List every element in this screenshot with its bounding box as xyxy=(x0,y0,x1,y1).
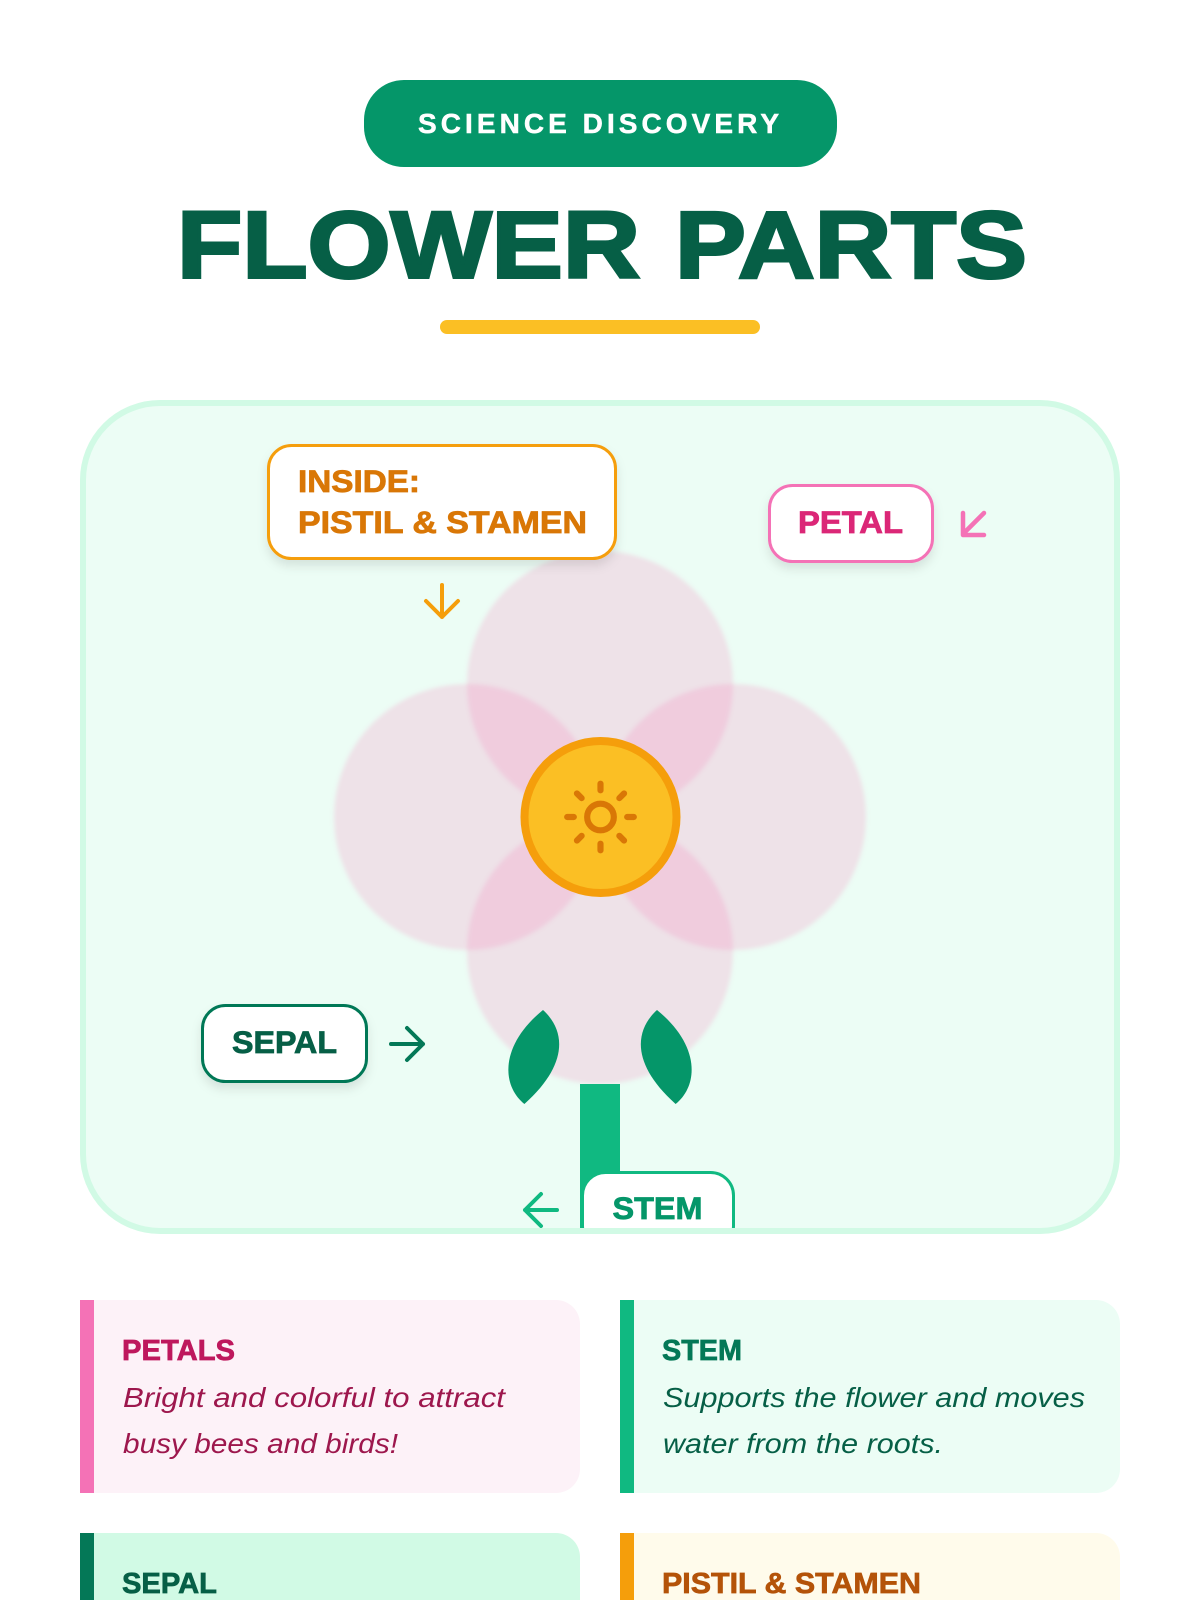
badge: science discovery xyxy=(364,80,837,167)
card: petals xyxy=(80,1300,580,1493)
right sepal xyxy=(641,1010,692,1104)
title xyxy=(177,192,1027,298)
icon: sun xyxy=(567,784,634,850)
card: stem: water from the roots. xyxy=(663,1428,943,1459)
label: stem xyxy=(584,1171,735,1228)
arrow: stem xyxy=(525,1194,557,1226)
flower center xyxy=(524,741,676,893)
card: sepal: SEPAL xyxy=(122,1568,217,1600)
title underline xyxy=(440,320,760,334)
card: pistil and stamen xyxy=(620,1533,1120,1600)
card: stem: STEM xyxy=(662,1335,742,1367)
card: petals: Bright and colorful to attract xyxy=(123,1382,506,1413)
label: sepal: SEPAL xyxy=(232,1024,337,1060)
title: PARTS xyxy=(675,192,1027,298)
card: pistil and stamen: PISTIL & STAMEN xyxy=(662,1568,921,1600)
panel: flower diagram xyxy=(83,403,1117,1248)
card: stem: Supports the flower and moves xyxy=(663,1382,1085,1413)
arrow: petal xyxy=(963,513,984,535)
arrow: sepal xyxy=(391,1028,423,1060)
badge: science discovery: SCIENCE DISCOVERY xyxy=(418,108,779,139)
left sepal xyxy=(508,1010,559,1104)
label: petal: PETAL xyxy=(798,504,903,540)
label: sepal xyxy=(202,1006,366,1082)
card: petals: busy bees and birds! xyxy=(123,1428,398,1459)
label: stem: STEM xyxy=(612,1190,702,1226)
label: inside pistil and stamen: PISTIL & STAMEN xyxy=(298,504,587,540)
card: stem xyxy=(620,1300,1120,1493)
card: petals: PETALS xyxy=(122,1335,235,1367)
arrow: down to center xyxy=(426,585,458,617)
label: inside pistil and stamen: INSIDE: xyxy=(298,463,420,499)
flower petals xyxy=(334,551,866,1084)
card: sepal xyxy=(80,1533,580,1600)
stem xyxy=(580,1084,620,1244)
label: inside pistil and stamen xyxy=(268,446,616,558)
title: FLOWER xyxy=(177,192,640,298)
label: petal xyxy=(770,486,932,562)
